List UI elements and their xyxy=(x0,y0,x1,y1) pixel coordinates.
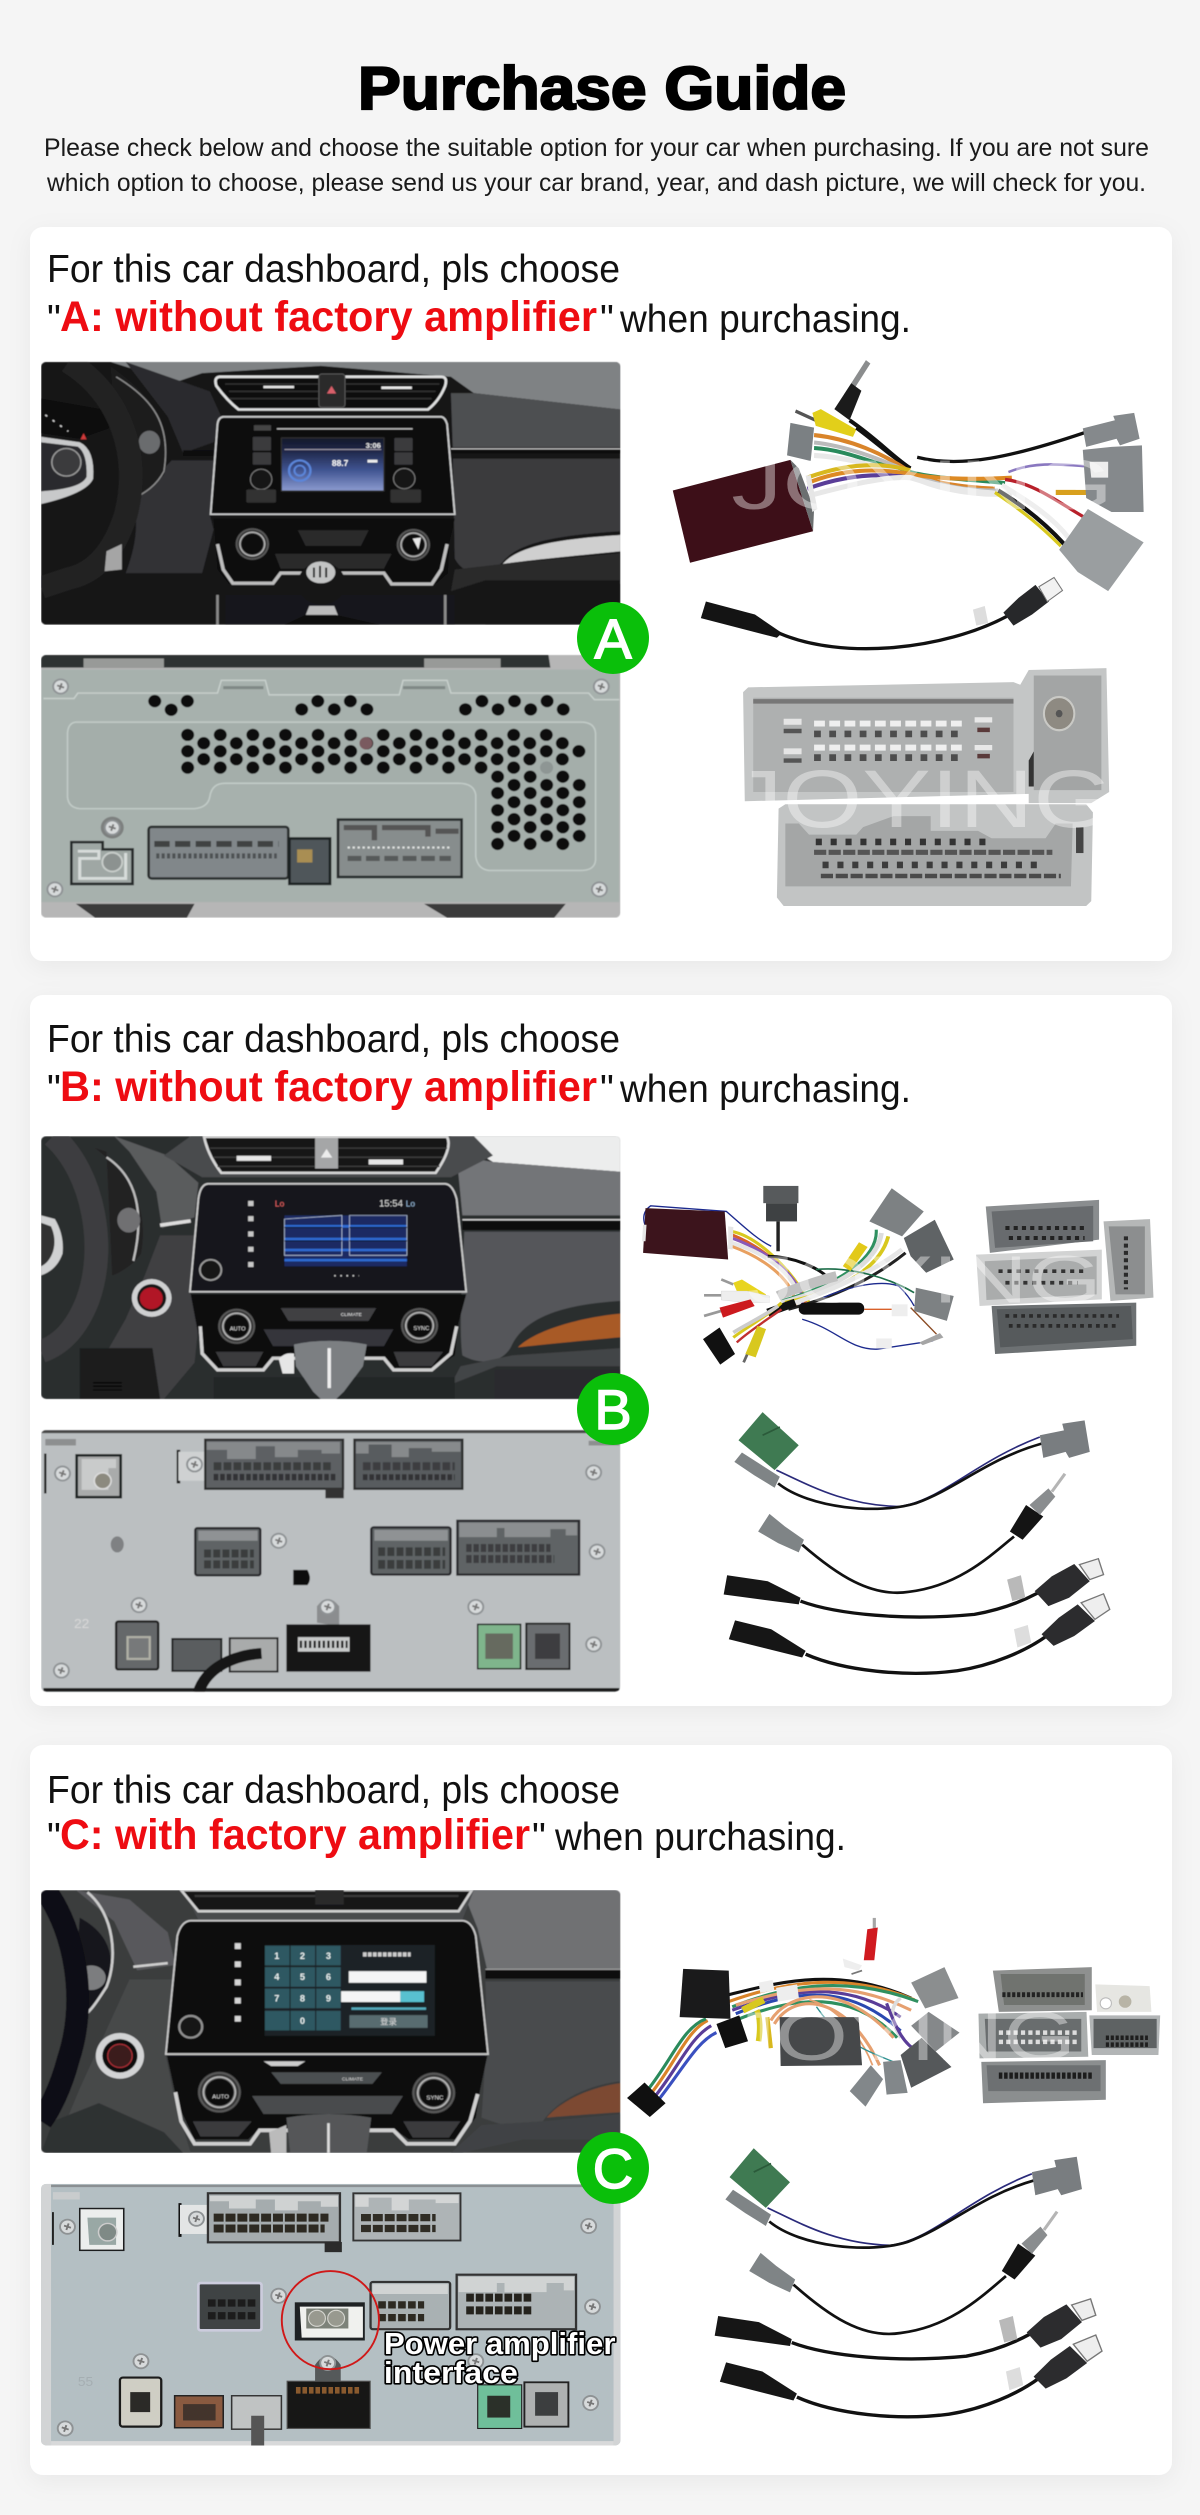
photo: dashboard B xyxy=(41,1136,620,1399)
panel: option A xyxy=(30,227,1172,961)
head unit xyxy=(211,417,455,514)
top connector xyxy=(763,1186,798,1221)
keypad xyxy=(265,1945,435,2036)
watermarks A: JOYING xyxy=(731,753,1113,845)
keypad: 7 xyxy=(274,1994,279,2004)
keypad: 3 xyxy=(326,1951,331,1961)
red highlight circle xyxy=(282,2271,379,2369)
gear knob xyxy=(300,564,344,576)
card A background xyxy=(30,227,1172,961)
wire bundle xyxy=(648,1971,918,2100)
watermark B: JOYING xyxy=(747,1244,1102,1317)
heading B: when purchasing. xyxy=(619,1068,911,1111)
adapter cables C xyxy=(715,2148,1102,2417)
card C background xyxy=(30,1745,1172,2475)
keypad: 8 xyxy=(300,1994,305,2004)
photo: radio back panel B: 22 xyxy=(74,1616,89,1631)
heading C: " xyxy=(532,1816,546,1859)
photo: radio back panel A xyxy=(41,655,620,918)
keypad: 2 xyxy=(300,1951,305,1961)
badge B: B xyxy=(594,1378,632,1441)
badge C: C xyxy=(593,2137,633,2200)
photo: dashboard B: Lo xyxy=(275,1200,285,1208)
usb cable A xyxy=(701,577,1063,649)
rca and antenna plugs xyxy=(795,362,868,437)
heading C: For this car dashboard, pls choose xyxy=(47,1769,620,1812)
photo: radio back panel C: 55 xyxy=(78,2374,93,2389)
heading C: when purchasing. xyxy=(554,1816,846,1859)
harness A xyxy=(673,362,1144,906)
badge A xyxy=(577,602,649,674)
heading A: A: without factory amplifier xyxy=(60,293,597,341)
intro text xyxy=(44,134,1149,197)
panel: option C xyxy=(30,1745,1172,2475)
shifter xyxy=(279,1353,294,1374)
heading B: B: without factory amplifier xyxy=(60,1063,597,1111)
rca plugs xyxy=(704,1242,868,1362)
heading C xyxy=(47,1769,846,1859)
filter and black plug xyxy=(703,1303,943,1365)
climate xyxy=(167,2056,487,2139)
photo: dashboard C: SYNC xyxy=(426,2096,444,2101)
watermarks A xyxy=(731,446,1113,845)
heading A: For this car dashboard, pls choose xyxy=(47,248,620,291)
title: Purchase Guide xyxy=(358,55,846,122)
vent xyxy=(164,1136,493,1177)
photo: dashboard B: 15:54 xyxy=(379,1199,403,1208)
climate xyxy=(191,1294,466,1372)
heading C: " xyxy=(47,1816,61,1859)
wheel xyxy=(41,1136,96,1352)
black connectors xyxy=(627,2015,748,2117)
keypad: 9 xyxy=(326,1994,331,2004)
watermarks A: JOYING xyxy=(731,446,1113,525)
keypad: 6 xyxy=(326,1972,331,1982)
grey module xyxy=(780,2017,862,2066)
screen panel xyxy=(190,1184,466,1292)
connector block top xyxy=(743,668,1109,803)
heading B: For this car dashboard, pls choose xyxy=(47,1018,620,1061)
start button xyxy=(132,1279,172,1317)
intro text: which option to choose, please send us your car brand, year, and dash picture, we will check for you. xyxy=(46,169,1146,197)
keypad: 5 xyxy=(300,1972,305,1982)
wheel xyxy=(41,1890,78,2121)
heading B: " xyxy=(600,1068,614,1111)
harness B xyxy=(642,1186,1153,1673)
screen panel xyxy=(166,1921,488,2054)
climate controls xyxy=(214,519,455,584)
photo: radio back panel C xyxy=(41,2184,620,2446)
harness C xyxy=(627,1918,1160,2417)
vent xyxy=(215,377,446,410)
badge A: A xyxy=(594,607,632,670)
connector block bottom xyxy=(777,804,1093,906)
badge C xyxy=(577,2132,649,2204)
heading B: " xyxy=(47,1068,61,1111)
labels xyxy=(759,1980,799,2002)
adapter cables B xyxy=(724,1412,1110,1673)
keypad: 4 xyxy=(274,1972,279,1982)
photo: dashboard B: AUTO xyxy=(230,1327,246,1333)
label: power amplifier interface: Power amplifier xyxy=(384,2327,615,2361)
grey connectors xyxy=(869,1188,954,1321)
grey plug on wires xyxy=(787,423,814,461)
decoder module xyxy=(673,460,813,563)
photo: radio back panel B xyxy=(41,1430,620,1693)
black module xyxy=(680,1969,730,2019)
photo: dashboard A: 3:06 xyxy=(366,441,381,450)
panel: option B xyxy=(30,995,1172,1706)
photo: dashboard C xyxy=(41,1890,620,2153)
photo: dashboard A: 88.7 xyxy=(332,459,349,468)
connector blocks C xyxy=(978,1967,1160,2103)
photo: dashboard B: Lo xyxy=(406,1200,416,1208)
wire bundle xyxy=(644,1206,937,1349)
start button xyxy=(96,2033,144,2079)
photo: dashboard C: 登录 xyxy=(380,2017,397,2027)
gear xyxy=(286,2114,371,2153)
steering wheel xyxy=(41,362,131,588)
screw tab xyxy=(315,2358,341,2381)
grey connectors xyxy=(850,1967,960,2107)
photo: dashboard A xyxy=(41,362,620,625)
keypad: 1 xyxy=(274,1951,279,1961)
photo: dashboard C: CLIMATE xyxy=(342,2077,364,2083)
vent holes xyxy=(155,701,579,844)
power amplifier connector xyxy=(295,2302,365,2340)
heading B xyxy=(47,1018,911,1111)
photo: dashboard B: CLIMATE xyxy=(341,1312,363,1318)
photo: dashboard B: SYNC xyxy=(413,1326,429,1332)
heading C: C: with factory amplifier xyxy=(60,1811,530,1859)
label: power amplifier interface xyxy=(384,2330,617,2385)
watermark C: JOYING xyxy=(729,1998,1076,2075)
heading A: when purchasing. xyxy=(619,298,911,341)
heading A xyxy=(47,248,911,341)
connectors xyxy=(71,842,133,884)
rca plug xyxy=(843,1918,878,1971)
card B background xyxy=(30,995,1172,1706)
decoder module B xyxy=(643,1208,728,1260)
keypad: 0 xyxy=(300,2016,305,2026)
heading A: " xyxy=(47,298,61,341)
right connectors xyxy=(1059,413,1144,591)
photo: dashboard C: AUTO xyxy=(212,2095,229,2101)
wire bundle xyxy=(807,420,1090,546)
intro text: Please check below and choose the suitable option for your car when purchasing. If you are not sure xyxy=(44,134,1149,162)
label: power amplifier interface: interface xyxy=(384,2356,518,2390)
badge B xyxy=(577,1373,649,1445)
heading A: " xyxy=(600,298,614,341)
connector blocks B xyxy=(976,1200,1153,1354)
